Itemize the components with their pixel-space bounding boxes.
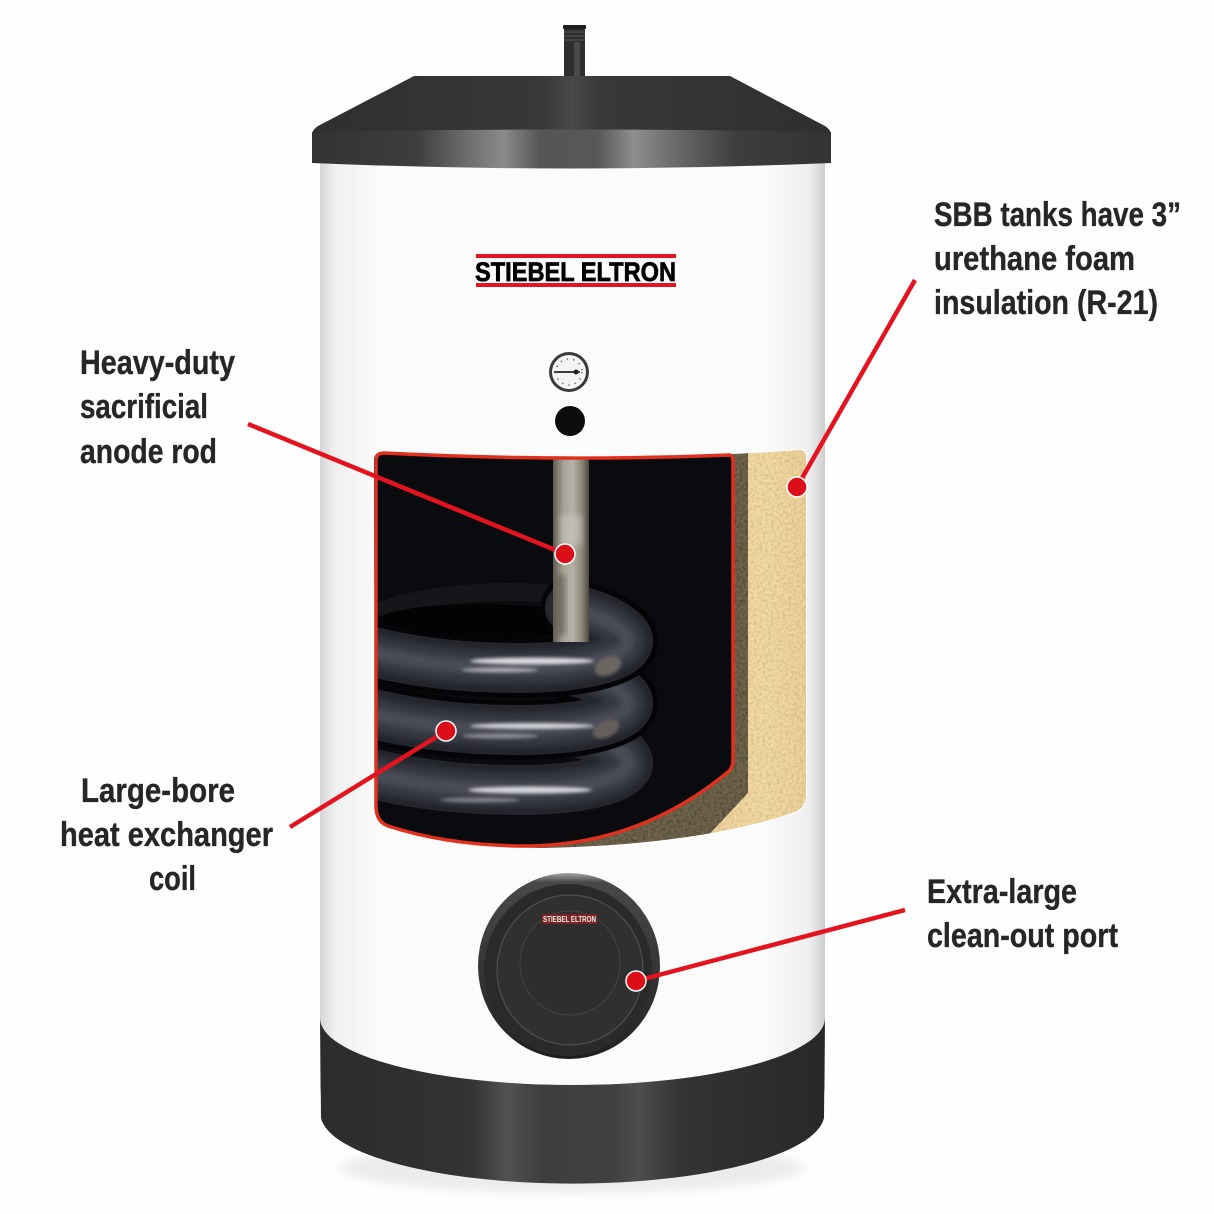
callout: clean-out port [626,873,1118,991]
floor shadow [340,1143,804,1193]
label text: insulation (R-21) [934,284,1158,322]
coil ring back [378,583,550,616]
leader line [636,910,905,981]
fitting: top pipe [563,25,586,77]
label text [934,196,1181,322]
top cap [312,76,831,168]
port logo: STIEBEL ELTRON [543,915,596,924]
black knob [555,406,585,436]
coil ring 1 [365,608,628,668]
temperature gauge [549,352,589,392]
label text: urethane foam [934,240,1135,278]
label text: Extra-large [927,873,1077,911]
anode rod [553,458,589,642]
callout: coil [60,721,456,898]
heat exchanger coil [365,592,628,802]
label text [80,344,235,471]
marker [787,477,807,497]
label text: Heavy-duty [80,344,235,382]
label text [927,873,1118,955]
marker [626,971,646,991]
inner tank [365,450,740,850]
red inner tank outline [376,453,733,846]
callout: anode rod [80,344,575,564]
label text: sacrificial [80,388,208,426]
label text: heat exchanger [60,816,273,854]
leader line [290,731,446,827]
coil ring 2 [365,670,628,730]
coil highlights [440,652,624,802]
water heater tank [312,25,831,1193]
brand logo: STIEBEL ELTRON [475,257,676,287]
callout: insulation [787,196,1181,497]
label text: Large-bore [81,772,235,810]
label text: anode rod [80,433,217,471]
leader line [248,424,565,554]
label text: coil [149,860,196,898]
base skirt [320,1018,825,1184]
marker [436,721,456,741]
tank body [320,160,825,1090]
foam insulation [692,450,806,836]
coil ring 3 [365,730,628,790]
label text [60,772,273,898]
leader line [797,280,915,487]
marker [555,544,575,564]
outer steel layer [526,453,748,848]
clean-out port [478,873,660,1059]
label text: clean-out port [927,917,1118,955]
cutaway window [365,440,815,852]
